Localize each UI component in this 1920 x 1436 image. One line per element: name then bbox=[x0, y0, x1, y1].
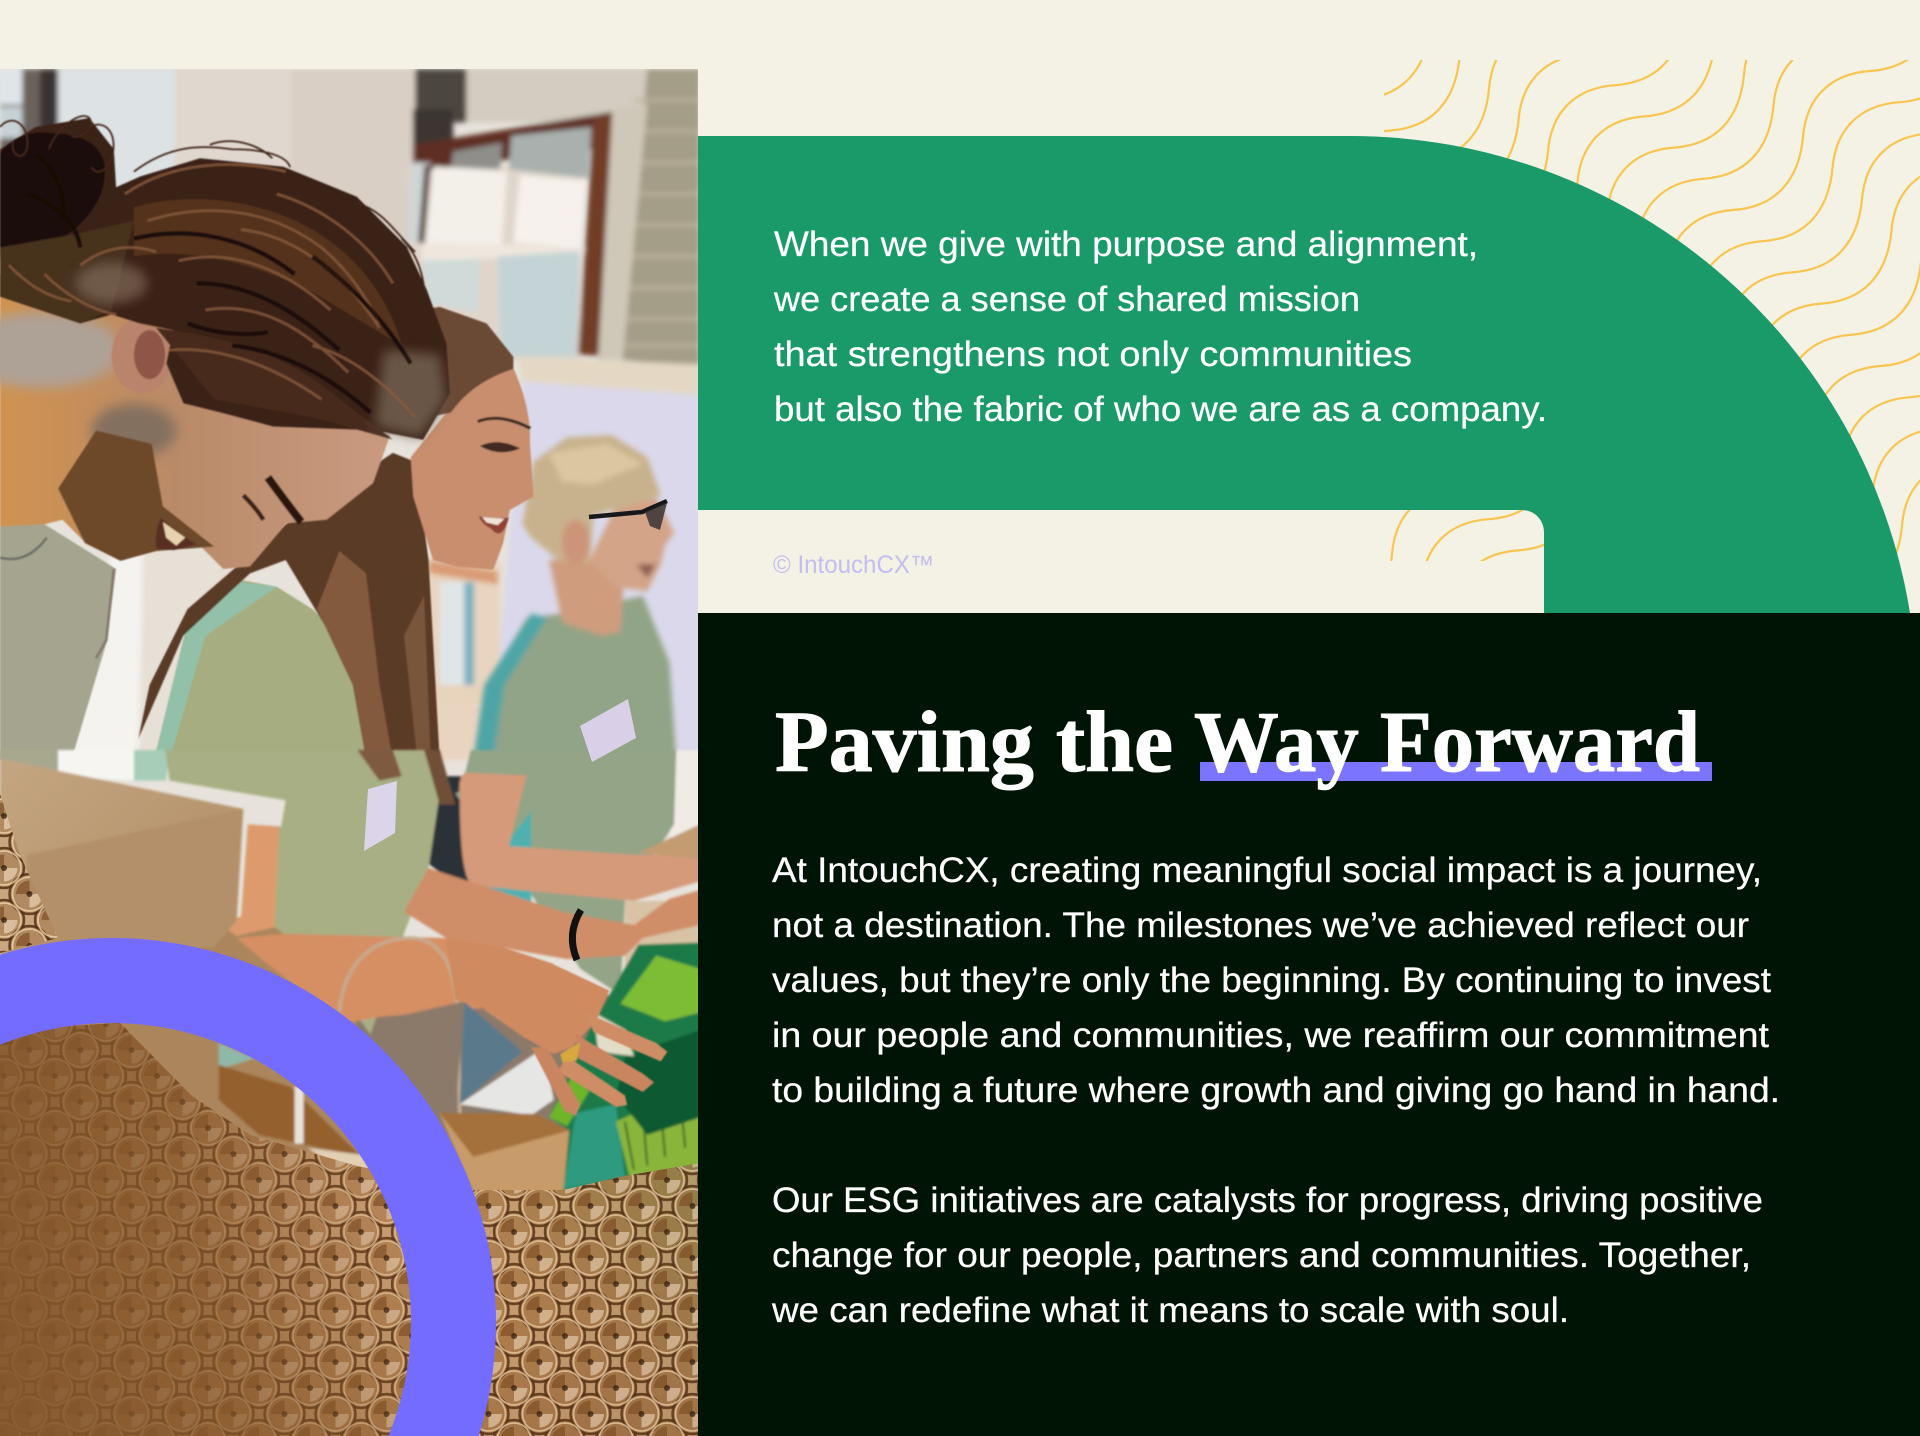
icon: woman's name badge bbox=[364, 781, 397, 851]
quote text: When we give with purpose and alignment, bbox=[774, 225, 1478, 264]
dark lower panel bbox=[698, 613, 1920, 1436]
heading: Way Forward bbox=[1194, 693, 1700, 790]
body paragraph one bbox=[772, 851, 1780, 1110]
body paragraph one: in our people and communities, we reaffirm our commitment bbox=[772, 1016, 1769, 1055]
icon: older woman's name badge bbox=[580, 699, 636, 762]
body paragraph two bbox=[771, 1181, 1763, 1330]
icon: glasses bbox=[589, 501, 667, 530]
man's shirt and face bbox=[0, 274, 390, 760]
texture: metallic bubble overlay bbox=[0, 794, 700, 1436]
heading: Paving the bbox=[775, 693, 1173, 790]
heading bbox=[775, 693, 1700, 790]
quote text: but also the fabric of who we are as a company. bbox=[774, 390, 1547, 429]
man's curly hair bbox=[0, 116, 450, 440]
icon: black wristband bbox=[572, 910, 581, 960]
photo: woman with glasses in the background bbox=[473, 435, 676, 760]
photo: volunteers packing boxes bbox=[0, 69, 698, 1190]
body paragraph one: not a destination. The milestones we’ve achieved reflect our bbox=[772, 906, 1749, 945]
body paragraph two: Our ESG initiatives are catalysts for progress, driving positive bbox=[772, 1181, 1763, 1220]
body paragraph one: At IntouchCX, creating meaningful social impact is a journey, bbox=[772, 851, 1762, 890]
photo: woman with long hair bbox=[138, 307, 533, 760]
photo: man with curly hair looking down bbox=[0, 116, 450, 760]
quote text: that strengthens not only communities bbox=[774, 335, 1412, 374]
decorative wave pattern bbox=[1384, 60, 1920, 561]
purple ring bbox=[0, 938, 496, 1436]
quote text: we create a sense of shared mission bbox=[773, 280, 1360, 319]
body paragraph one: to building a future where growth and giving go hand in hand. bbox=[772, 1071, 1780, 1110]
quote text bbox=[773, 225, 1547, 429]
green arch panel bbox=[698, 136, 1910, 613]
photo: hand reaching into bag bbox=[446, 938, 667, 1116]
photo lower: arms, box and bags bbox=[0, 750, 700, 1196]
heading underline highlight bbox=[1200, 762, 1712, 781]
copyright: © IntouchCX™ bbox=[773, 551, 934, 579]
body paragraph one: values, but they’re only the beginning. By continuing to invest bbox=[772, 961, 1771, 1000]
body paragraph two: change for our people, partners and communities. Together, bbox=[772, 1236, 1751, 1275]
body paragraph two: we can redefine what it means to scale with soul. bbox=[771, 1291, 1569, 1330]
photo upper: room and window bbox=[0, 69, 700, 760]
